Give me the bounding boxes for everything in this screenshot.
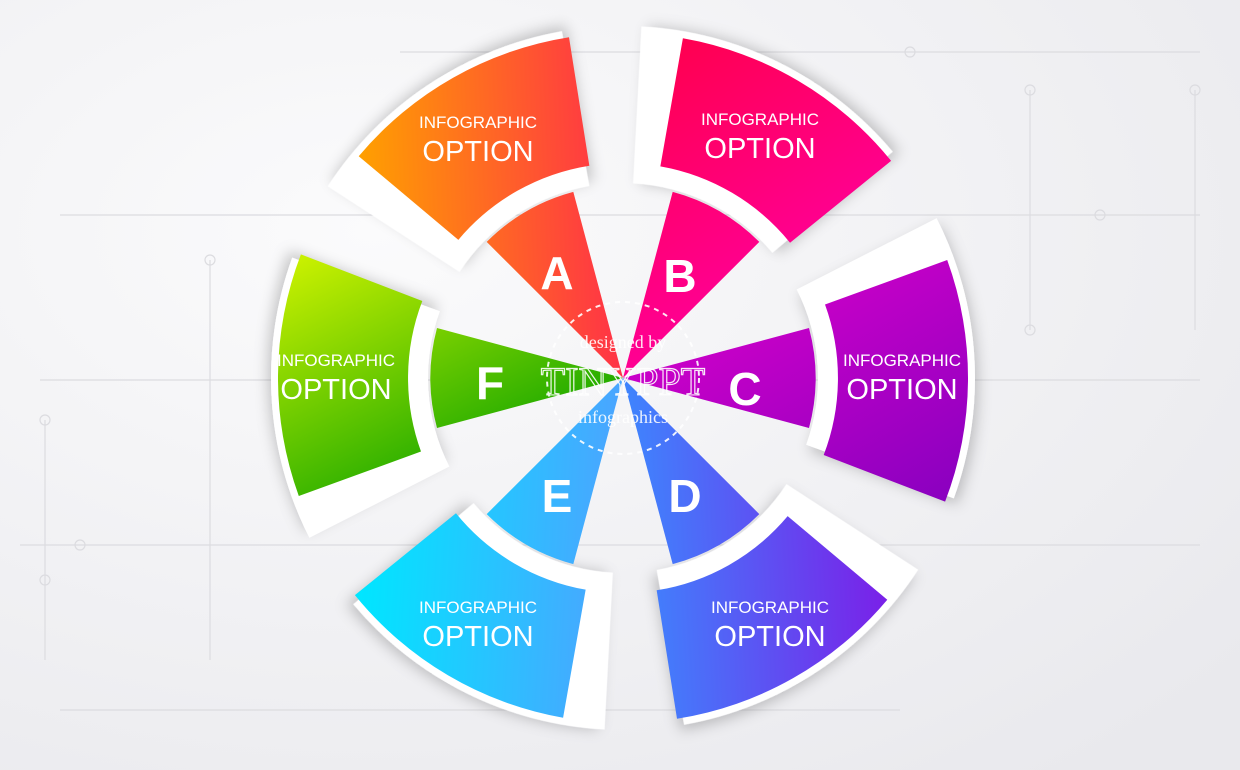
option labels: OPTION xyxy=(422,621,534,653)
segment F xyxy=(271,254,623,538)
option labels: INFOGRAPHIC xyxy=(711,598,829,617)
segment E xyxy=(340,316,761,763)
option labels: INFOGRAPHIC xyxy=(419,598,537,617)
option labels: OPTION xyxy=(704,133,816,165)
letters: F xyxy=(476,357,504,409)
option labels: OPTION xyxy=(846,374,958,406)
center watermark: infographics xyxy=(578,407,668,427)
letters: C xyxy=(728,363,762,415)
option labels: OPTION xyxy=(714,621,826,653)
option labels: OPTION xyxy=(422,136,534,168)
segment D xyxy=(516,298,937,745)
center watermark xyxy=(541,302,705,454)
option labels: INFOGRAPHIC xyxy=(277,351,395,370)
center watermark: TINYPPT xyxy=(541,359,705,404)
option labels xyxy=(277,110,961,653)
segment B xyxy=(485,0,906,440)
letters: D xyxy=(668,470,702,522)
segment A xyxy=(309,11,730,458)
option labels: INFOGRAPHIC xyxy=(419,113,537,132)
letters xyxy=(476,247,762,522)
option labels: OPTION xyxy=(280,374,392,406)
option labels: INFOGRAPHIC xyxy=(843,351,961,370)
center watermark: designed by xyxy=(580,332,666,352)
letters: B xyxy=(663,250,697,302)
option labels: INFOGRAPHIC xyxy=(701,110,819,129)
segment C xyxy=(623,218,975,502)
letters: E xyxy=(542,470,572,522)
letters: A xyxy=(540,247,574,299)
